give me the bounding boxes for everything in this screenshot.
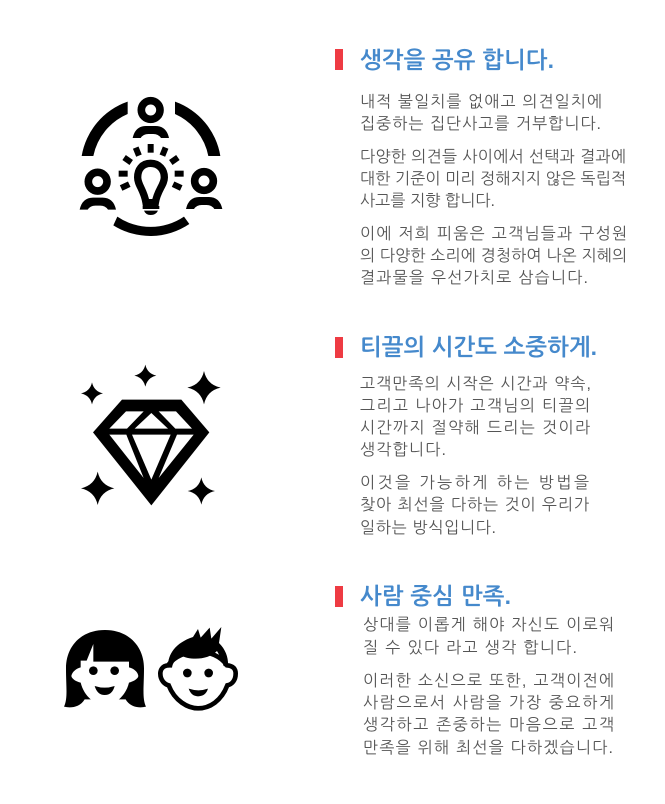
- marker: red bar 3: [335, 586, 343, 607]
- text block: sharing ideas body: 집중하는 집단사고를 거부합니다.: [360, 115, 601, 133]
- icon: boy face: [160, 627, 236, 708]
- text block: people first body: 생각하고 존중하는 마음으로 고객: [363, 716, 614, 734]
- text block: people first body: 질 수 있다 라고 생각 합니다.: [363, 639, 577, 657]
- panel: sharing ideas: [335, 47, 627, 287]
- icon: girl face: [64, 630, 146, 707]
- text block: every moment body: 고객만족의 시작은 시간과 약속,: [360, 375, 591, 393]
- text block: sharing ideas body: 의 다양한 소리에 경청하여 나온 지혜의: [360, 247, 627, 265]
- text block: sharing ideas body: 이에 저희 피움은 고객님들과 구성원: [360, 225, 627, 243]
- text block: every moment body: [360, 375, 591, 537]
- heading: people first: 사람 중심 만족.: [360, 583, 511, 609]
- text block: every moment body: 그리고 나아가 고객님의 티끌의: [360, 397, 590, 415]
- text block: every moment body: 이것을 가능하게 하는 방법을: [360, 474, 589, 492]
- text block: every moment body: 생각합니다.: [360, 441, 446, 459]
- text block: every moment body: 일하는 방식입니다.: [360, 519, 496, 537]
- text block: people first body: 이러한 소신으로 또한, 고객이전에: [363, 672, 614, 690]
- text block: every moment body: 시간까지 절약해 드리는 것이라: [360, 419, 590, 437]
- text block: people first body: 상대를 이롭게 해야 자신도 이로워: [363, 616, 614, 634]
- text block: every moment body: 찾아 최선을 다하는 것이 우리가: [360, 496, 589, 514]
- text block: sharing ideas body: 다양한 의견들 사이에서 선택과 결과에: [360, 148, 626, 166]
- text block: people first body: 만족을 위해 최선을 다하겠습니다.: [363, 739, 613, 757]
- text block: people first body: 사람으로서 사람을 가장 중요하게: [363, 694, 614, 712]
- text block: sharing ideas body: 대한 기준이 미리 정해지지 않은 독립적: [360, 170, 626, 188]
- text block: sharing ideas body: 결과물을 우선가치로 삼습니다.: [360, 269, 588, 287]
- heading: sharing ideas: 생각을 공유 합니다.: [360, 47, 554, 73]
- panel: people first: [335, 583, 614, 757]
- icon: diamond with sparkles: [81, 365, 221, 505]
- marker: red bar 1: [335, 49, 343, 70]
- icon: collaboration ring with light bulb: [80, 101, 222, 236]
- text block: sharing ideas body: [360, 93, 627, 287]
- text block: sharing ideas body: 내적 불일치를 없애고 의견일치에: [360, 93, 602, 111]
- text block: sharing ideas body: 사고를 지향 합니다.: [360, 192, 495, 210]
- text block: people first body: [363, 616, 614, 757]
- panel: every moment matters: [335, 334, 597, 537]
- marker: red bar 2: [335, 337, 343, 358]
- heading: every moment matters: 티끌의 시간도 소중하게.: [360, 334, 597, 360]
